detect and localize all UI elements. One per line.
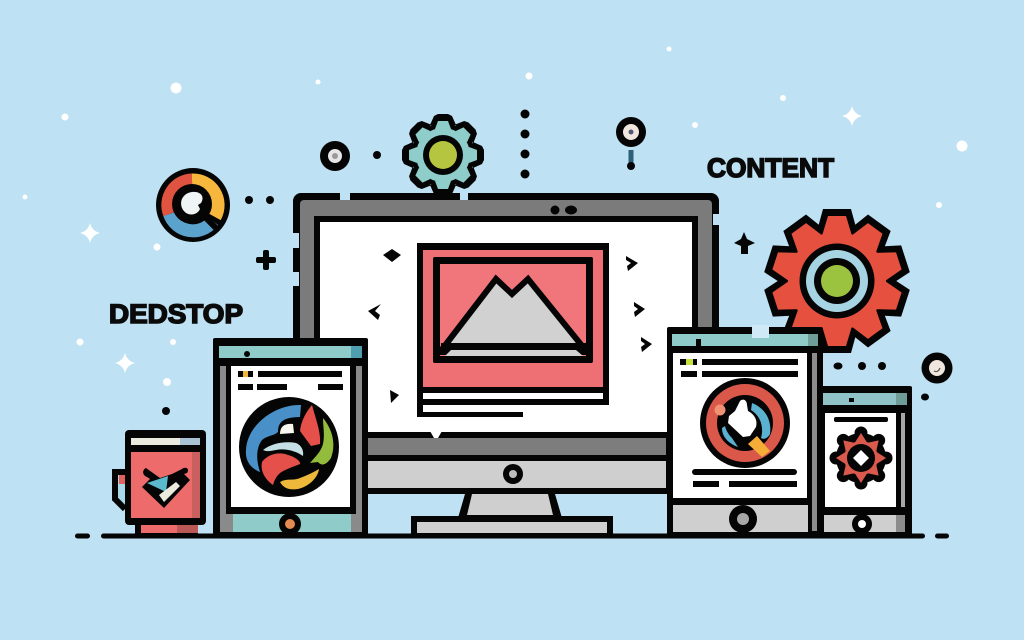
pin icon top	[616, 117, 646, 170]
small round icon right	[922, 352, 952, 384]
screen marks	[368, 249, 652, 403]
right tablet	[667, 325, 823, 536]
tablet base	[220, 507, 362, 535]
small phone	[819, 386, 912, 536]
black dots and plus marks	[162, 110, 929, 415]
small teal gear	[402, 114, 484, 196]
mug heart icon	[142, 468, 190, 508]
wrench badge	[700, 378, 790, 468]
desktop monitor	[289, 193, 720, 536]
phone header	[823, 393, 907, 405]
coffee mug	[115, 430, 206, 536]
right tablet header	[672, 325, 818, 346]
decorative white sparkles	[22, 46, 968, 386]
right tablet base	[673, 505, 808, 533]
large red gear	[762, 209, 912, 353]
left tablet	[213, 338, 368, 536]
multicolor circle logo	[239, 397, 339, 497]
ground line	[75, 534, 949, 538]
tablet text lines	[238, 371, 343, 390]
image frame with mountain	[417, 243, 609, 417]
magnifier pie icon	[156, 168, 230, 242]
small round icon left	[320, 141, 350, 171]
power button	[503, 464, 523, 484]
monitor chin	[366, 431, 668, 494]
monitor bezel	[289, 193, 720, 443]
tablet header	[219, 346, 362, 358]
monitor screen	[314, 216, 698, 438]
phone base	[824, 514, 905, 534]
monitor stand	[411, 494, 613, 536]
label: CONTENT: CONTENT	[707, 153, 834, 183]
label: DEDSTOP: DEDSTOP	[109, 299, 243, 329]
phone gear icon	[830, 426, 892, 490]
right tablet text lines	[680, 359, 798, 487]
mug handle	[115, 472, 126, 509]
